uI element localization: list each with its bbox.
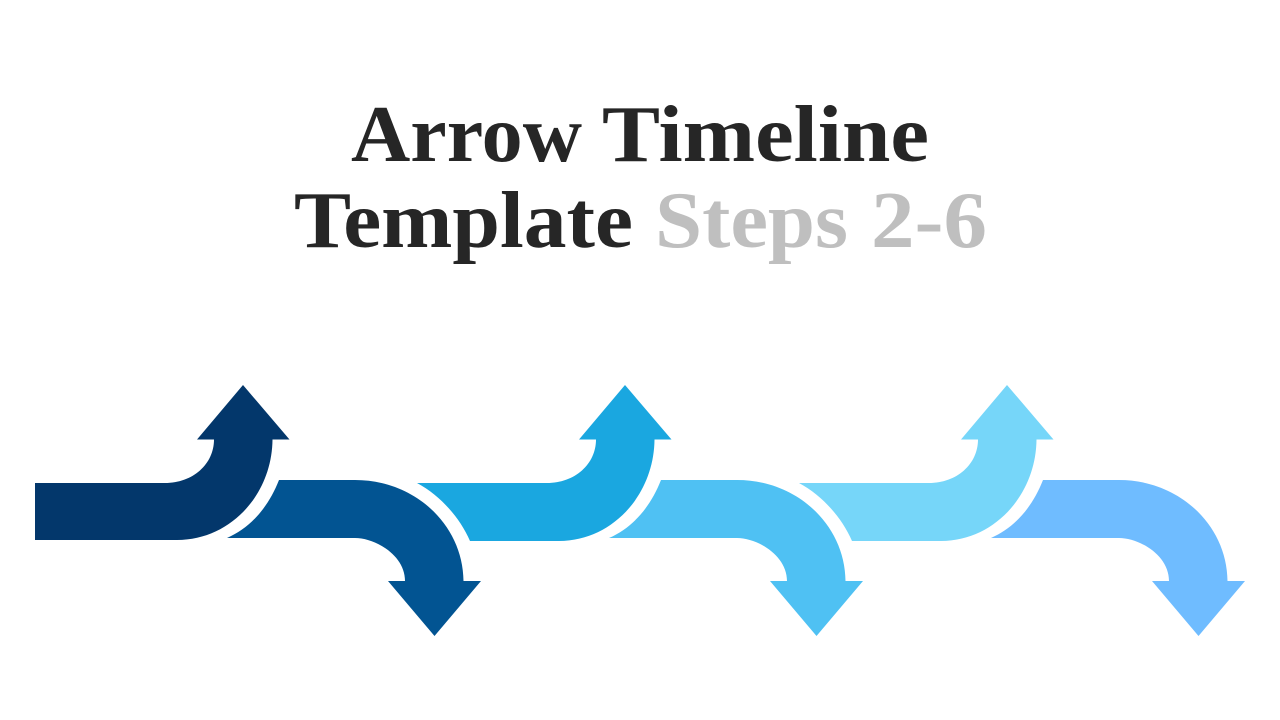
arrow 3: up, bright blue xyxy=(417,385,672,541)
title: 2-6 xyxy=(871,177,987,265)
arrow timeline xyxy=(35,385,1245,636)
arrow 6: down, light blue xyxy=(991,480,1245,636)
title: Template xyxy=(294,177,633,265)
arrow 1: up, navy xyxy=(35,385,290,540)
arrow 2: down, dark blue xyxy=(227,480,481,636)
title xyxy=(294,91,987,265)
title: Timeline xyxy=(602,91,929,179)
arrow 4: down, sky blue xyxy=(609,480,863,636)
title: Arrow xyxy=(351,91,582,179)
arrow 5: up, pale blue xyxy=(799,385,1054,541)
title: Steps xyxy=(655,177,848,265)
